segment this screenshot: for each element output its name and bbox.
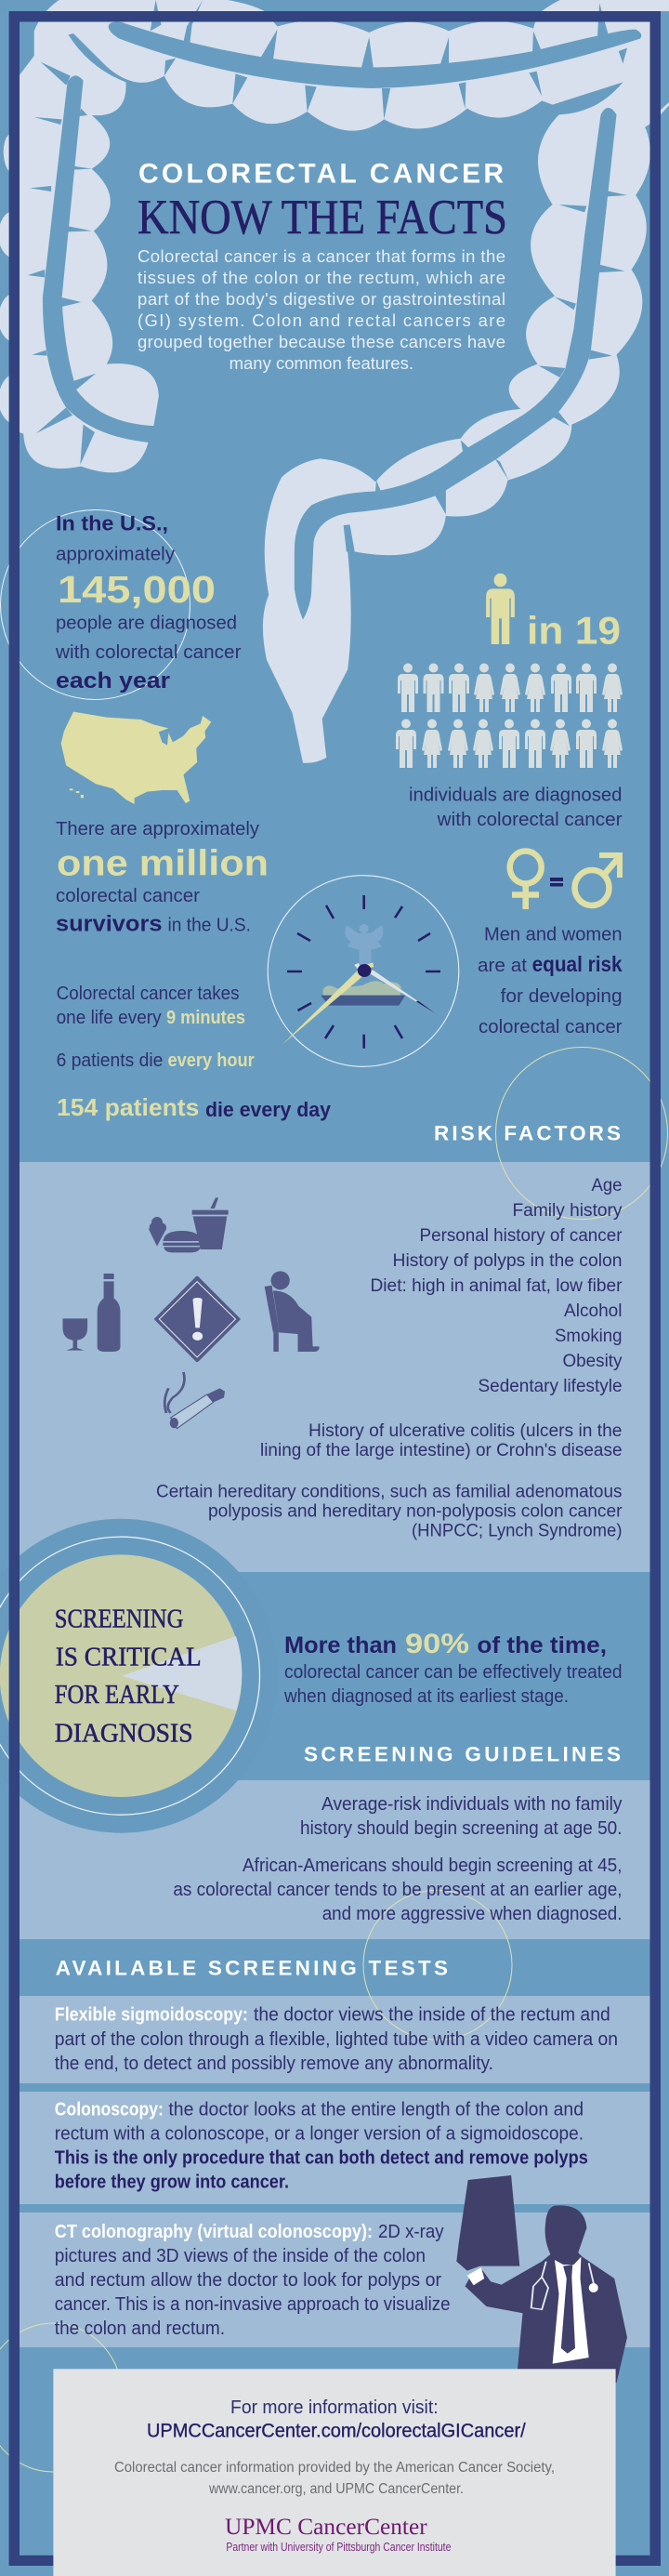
panel: screening guidelines: [20, 1780, 650, 1939]
text: equal risk: are at: [478, 955, 527, 976]
footer panel: [53, 2369, 616, 2576]
text: flexible sigmoidoscopy: Flexible sigmoidoscopy:: [55, 2004, 248, 2025]
text: guidelines: African-Americans should begin screening at 45,: [243, 1856, 623, 1876]
text: colonoscopy: the doctor looks at the entire length of the colon and: [168, 2100, 584, 2120]
text: flexible sigmoidoscopy: [55, 2004, 618, 2074]
text: guidelines: and more aggressive when diagnosed.: [322, 1904, 623, 1924]
risk factor list: Personal history of cancer: [420, 1226, 623, 1246]
risk factor list: Smoking: [555, 1327, 623, 1346]
text: ulcerative colitis: [260, 1421, 623, 1460]
icon: seated person: [265, 1271, 320, 1352]
ring decoration: risk factors: [496, 1047, 667, 1220]
icon: wine and bottle: [62, 1274, 120, 1352]
ring decoration: screening tests: [363, 1890, 512, 2040]
intro text block: Colorectal cancer is a cancer that forms in the: [138, 246, 505, 266]
stat: diagnoses per year: with colorectal cancer: [55, 641, 242, 663]
footer: call to action: For more information visit:: [230, 2398, 439, 2418]
text: CT colonography: pictures and 3D views of the inside of the colon: [55, 2246, 426, 2266]
intro text block: (GI) system. Colon and rectal cancers are: [138, 310, 505, 330]
intro text block: many common features.: [230, 353, 413, 373]
icon: warning sign: [156, 1277, 239, 1361]
panel: flexible sigmoidoscopy: [20, 1996, 650, 2083]
heading: screening is critical: [55, 1605, 202, 1748]
risk factor list: Alcohol: [564, 1301, 623, 1321]
stats: mortality: 154 patients: [57, 1093, 199, 1121]
stats: mortality: [57, 983, 332, 1121]
stat: diagnoses per year: In the U.S.,: [56, 512, 168, 535]
risk factor list: Diet: high in animal fat, low fiber: [370, 1276, 623, 1296]
text: equal risk: Men and women: [484, 924, 623, 945]
text: colonoscopy: This is the only procedure that can both detect and remove polyps: [55, 2148, 588, 2169]
clock hands: [282, 962, 436, 1044]
heading: screening is critical: SCREENING: [55, 1605, 183, 1634]
stats: mortality: die every day: [205, 1098, 332, 1121]
text: CT colonography: CT colonography (virtual colonoscopy):: [55, 2222, 373, 2242]
heading: screening is critical: DIAGNOSIS: [55, 1719, 193, 1748]
footer: link: UPMCCancerCenter.com/colorectalGICancer/: [147, 2421, 526, 2442]
text: colonoscopy: before they grow into cancer.: [55, 2173, 289, 2193]
stat: diagnoses per year: people are diagnosed: [56, 613, 237, 634]
text: CT colonography: [55, 2222, 451, 2339]
risk factor list: [370, 1176, 623, 1396]
stat: one in 19: [486, 574, 621, 653]
text: equal risk: [478, 924, 623, 1037]
stat: survivors: one million: [57, 844, 269, 884]
intro text block: tissues of the colon or the rectum, which are: [138, 268, 505, 287]
text: flexible sigmoidoscopy: part of the colon through a flexible, lighted tube with a video camera on: [55, 2029, 618, 2050]
title: [138, 158, 507, 244]
risk factor list: History of polyps in the colon: [392, 1251, 623, 1271]
text: equal risk: colorectal cancer: [479, 1016, 623, 1037]
text: colonoscopy: Colonoscopy:: [55, 2100, 164, 2120]
footer: credits: [114, 2460, 555, 2497]
text: ulcerative colitis: lining of the large intestine) or Crohn's disease: [260, 1441, 623, 1460]
text: hereditary conditions: [156, 1483, 623, 1541]
footer: credits: Colorectal cancer information provided by the American Cancer Society,: [114, 2460, 555, 2476]
stat: diagnoses per year: approximately: [56, 544, 176, 565]
text: individuals diagnosed: with colorectal cancer: [437, 809, 623, 830]
clock figures: angel and patient: [321, 924, 405, 1006]
stat: survivors: survivors: [56, 912, 162, 937]
text: guidelines: [173, 1794, 623, 1924]
text: guidelines: as colorectal cancer tends to be present at an earlier age,: [173, 1880, 623, 1900]
stat: one in 19: in 19: [527, 609, 621, 653]
risk icons: [62, 1197, 320, 1429]
logo: UPMC CancerCenter: Partner with University of Pittsburgh Cancer Institute: [226, 2540, 451, 2554]
text: hereditary conditions: (HNPCC; Lynch Syndrome): [412, 1522, 623, 1541]
pictogram: people grid: [396, 664, 623, 768]
text: flexible sigmoidoscopy: the doctor views the inside of the rectum and: [254, 2004, 610, 2025]
heading: screening guidelines: SCREENING GUIDELINES: [304, 1742, 621, 1765]
text: hereditary conditions: polyposis and hereditary non-polyposis colon cancer: [208, 1502, 623, 1522]
risk factor list: Sedentary lifestyle: [478, 1377, 623, 1396]
text: CT colonography: and rectum allow the doctor to look for polyps or: [55, 2270, 441, 2291]
stat: 90 percent: More than: [284, 1632, 397, 1658]
risk factor list: Family history: [513, 1201, 623, 1221]
text: hereditary conditions: Certain hereditary conditions, such as familial adenomatous: [156, 1483, 623, 1502]
text: colonoscopy: [55, 2100, 588, 2193]
icon: U.S. map: [61, 712, 211, 804]
illustration: doctor with x-ray: [456, 2175, 627, 2383]
icon: female equals male: [510, 852, 623, 909]
stat: diagnoses per year: [55, 512, 242, 694]
text: guidelines: Average-risk individuals with no family: [321, 1794, 623, 1815]
stat: 90 percent: when diagnosed at its earliest stage.: [283, 1686, 569, 1707]
logo: UPMC CancerCenter: [225, 2515, 451, 2554]
text: guidelines: history should begin screening at age 50.: [300, 1818, 623, 1839]
panel: CT colonography: [20, 2213, 650, 2347]
badge: screening pie: [0, 1519, 278, 1833]
text: equal risk: for developing: [501, 985, 623, 1007]
ring decoration: U.S. statistic: [0, 509, 190, 699]
stats: mortality: 6 patients die: [57, 1050, 163, 1071]
illustration: colon: [0, 0, 669, 763]
text: equal risk: equal risk: [532, 952, 623, 976]
text: colonoscopy: rectum with a colonoscope, or a longer version of a sigmoidoscope.: [55, 2124, 584, 2145]
ring decoration: lower left: [0, 2323, 123, 2472]
intro text block: grouped together because these cancers have: [138, 332, 505, 351]
text: CT colonography: the colon and rectum.: [55, 2318, 225, 2339]
stats: mortality: Colorectal cancer takes: [57, 983, 240, 1004]
stat: survivors: [56, 818, 269, 937]
risk factor list: Obesity: [563, 1352, 623, 1371]
heading: available screening tests: AVAILABLE SCREENING TESTS: [56, 1956, 448, 1979]
stat: survivors: in the U.S.: [167, 915, 251, 936]
icon: cigarette: [164, 1372, 225, 1429]
heading: screening is critical: IS CRITICAL: [56, 1644, 202, 1672]
stat: 90 percent: 90%: [405, 1629, 469, 1659]
title: KNOW THE FACTS: [138, 191, 507, 244]
stats: mortality: every hour: [167, 1050, 255, 1071]
stat: 90 percent: [283, 1629, 623, 1707]
title: COLORECTAL CANCER: [138, 158, 504, 190]
text: flexible sigmoidoscopy: the end, to detect and possibly remove any abnormality.: [55, 2054, 493, 2074]
stats: mortality: 9 minutes: [166, 1008, 245, 1028]
panel: risk factors: [20, 1162, 650, 1572]
stat: survivors: colorectal cancer: [56, 885, 200, 906]
heading: screening is critical: FOR EARLY: [55, 1681, 179, 1710]
risk factor list: Age: [591, 1176, 623, 1196]
panel: colonoscopy: [20, 2092, 650, 2204]
stat: diagnoses per year: each year: [56, 668, 170, 694]
intro text block: part of the body's digestive or gastrointestinal: [138, 289, 505, 309]
text: CT colonography: cancer. This is a non-invasive approach to visualize: [55, 2294, 451, 2315]
logo: UPMC CancerCenter: UPMC CancerCenter: [225, 2515, 427, 2540]
stat: survivors: There are approximately: [56, 818, 260, 839]
clock illustration: [268, 876, 459, 1066]
footer: credits: www.cancer.org, and UPMC CancerCenter.: [208, 2481, 464, 2497]
stats: mortality: one life every: [57, 1007, 162, 1028]
text: individuals diagnosed: [409, 785, 623, 830]
stat: 90 percent: of the time,: [477, 1632, 607, 1658]
text: ulcerative colitis: History of ulcerative colitis (ulcers in the: [308, 1421, 623, 1441]
heading: risk factors: RISK FACTORS: [434, 1122, 621, 1145]
text: individuals diagnosed: individuals are diagnosed: [409, 785, 623, 806]
clock ticks: [287, 895, 440, 1049]
stat: 90 percent: colorectal cancer can be effectively treated: [284, 1662, 623, 1683]
intro text block: [138, 246, 505, 373]
text: CT colonography: 2D x-ray: [378, 2222, 444, 2242]
icon: fast food: [149, 1197, 229, 1252]
stat: diagnoses per year: 145,000: [58, 568, 216, 611]
